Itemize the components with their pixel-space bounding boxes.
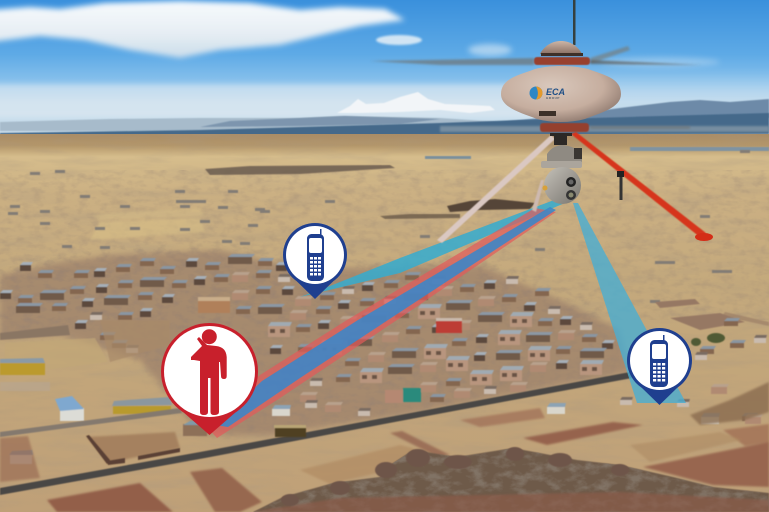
- clouds: [0, 1, 769, 118]
- sky: [0, 0, 769, 136]
- trees: [691, 333, 725, 346]
- antenna: [573, 0, 576, 45]
- left leg: [437, 135, 555, 243]
- gimbal bracket: [550, 133, 572, 136]
- road: [0, 372, 632, 495]
- drone: [370, 0, 713, 243]
- village houses: [0, 254, 615, 416]
- beam: cyan to left phone: [300, 194, 572, 297]
- beam: right cyan to phone: [573, 203, 686, 403]
- slope east: [690, 382, 769, 425]
- ECA logo: [530, 86, 565, 100]
- ECA logo: GROUP: [546, 96, 560, 100]
- field walls: [86, 435, 180, 465]
- village ground patch: [0, 250, 630, 435]
- red leg: [571, 132, 706, 238]
- mountains: [0, 92, 769, 131]
- sparse settlement speckle: [0, 170, 769, 320]
- ECA logo: ECA: [546, 87, 565, 97]
- camera ball: [542, 167, 581, 204]
- yellow school buildings: [0, 358, 207, 464]
- gimbal housing: [547, 145, 582, 162]
- lake on the horizon: [0, 113, 769, 136]
- bus: [274, 425, 306, 437]
- rotor blades lower: [590, 126, 690, 129]
- phone icon: [307, 229, 324, 281]
- leg foot: [695, 233, 713, 241]
- upper rotor hub: [534, 57, 590, 65]
- body vent: [539, 111, 556, 116]
- beam: red wide: [205, 208, 556, 438]
- boundary wall along school: [0, 408, 182, 437]
- pin: person: [161, 323, 258, 435]
- buildings below the road: [547, 384, 763, 424]
- main body: [501, 66, 621, 122]
- rotor blades upper: [370, 46, 702, 65]
- phone icon: [650, 335, 668, 387]
- person icon: [191, 329, 227, 415]
- lower-left compounds: [0, 320, 170, 391]
- pin: phone left: [283, 223, 347, 299]
- pin: phone right: [627, 328, 692, 405]
- village texture: [214, 320, 582, 404]
- dome base: [541, 53, 583, 56]
- gimbal ring: [541, 161, 582, 168]
- enclosures east of the village: [655, 299, 769, 330]
- distant features on the plain: [90, 147, 769, 240]
- lower rotor hub: [540, 123, 589, 132]
- foreground fields: [0, 408, 769, 512]
- leg strut: [620, 172, 622, 200]
- beam: blue core: [215, 207, 556, 427]
- terrain texture: [0, 134, 769, 512]
- sparse outlying houses: [8, 150, 750, 305]
- gimbal side box: [574, 148, 582, 159]
- gimbal mount: [554, 133, 567, 145]
- rocky hill: [250, 445, 769, 512]
- ground: [0, 134, 769, 512]
- dome: [540, 41, 582, 54]
- boulders: [281, 447, 629, 506]
- lower strut behind camera: [532, 180, 544, 212]
- houses to the east: [695, 318, 767, 360]
- strut clamp: [617, 171, 624, 177]
